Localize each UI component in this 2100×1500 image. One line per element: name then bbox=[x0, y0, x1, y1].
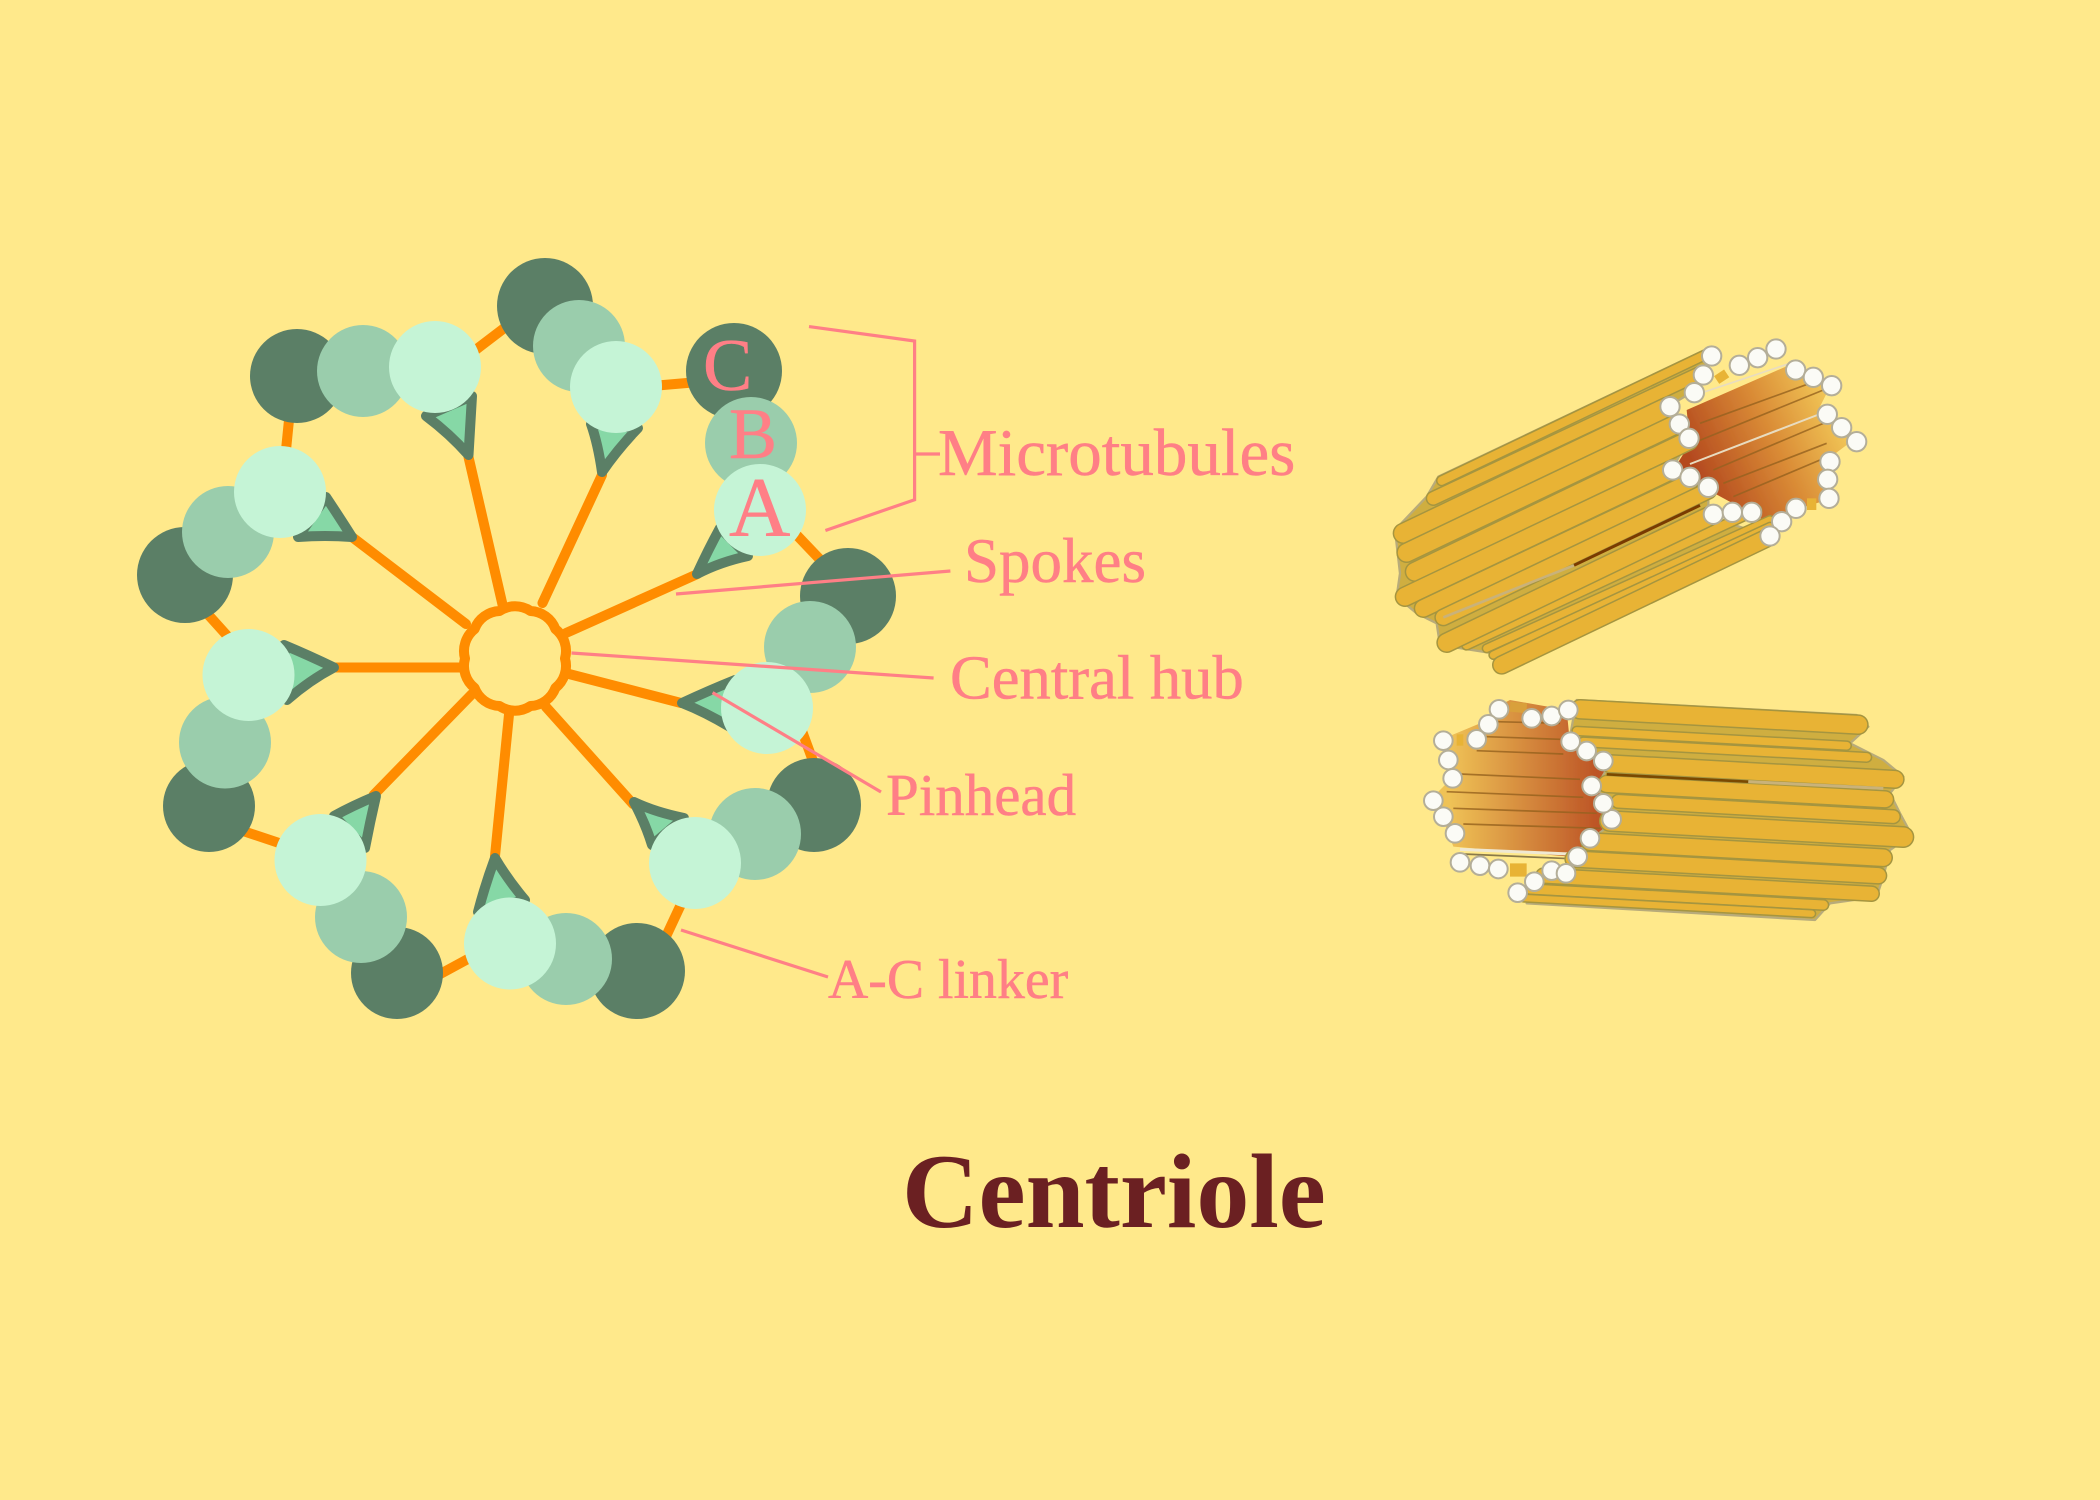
cross-section diagram bbox=[137, 258, 896, 1019]
barrel body bbox=[1395, 348, 1770, 672]
white tubule ends bbox=[1424, 700, 1621, 902]
barrel interior bbox=[1430, 700, 1617, 857]
label: C: C bbox=[703, 325, 752, 407]
upper centriole barrel bbox=[1395, 339, 1866, 672]
microtubule triplet 9 bbox=[137, 446, 326, 623]
rods bbox=[1580, 709, 1858, 725]
dark seam bbox=[1574, 505, 1700, 565]
microtubule triplet 7 bbox=[274, 814, 443, 1019]
leader: spokes bbox=[676, 571, 950, 594]
leader: A-C linker bbox=[681, 930, 828, 977]
spokes bbox=[334, 457, 698, 856]
microtubule triplet 5 bbox=[649, 758, 861, 909]
white tubule ends bbox=[1660, 339, 1866, 546]
microtubule triplet 2 bbox=[497, 258, 662, 433]
leader: microtubules bracket bbox=[809, 327, 940, 530]
label: Microtubules: Microtubules bbox=[938, 416, 1295, 490]
microtubule triplet 3 (A, B, C) bbox=[686, 323, 806, 556]
title: Centriole bbox=[902, 1133, 1326, 1250]
label: Central hub: Central hub bbox=[950, 642, 1244, 712]
lower centriole barrel bbox=[1424, 700, 1912, 920]
barrel body bbox=[1527, 700, 1912, 920]
label: Spokes: Spokes bbox=[964, 526, 1146, 596]
label: Pinhead: Pinhead bbox=[886, 762, 1076, 828]
microtubule triplet 8 bbox=[163, 629, 294, 852]
interior short rods bbox=[1717, 373, 1727, 380]
label: B: B bbox=[729, 394, 777, 474]
rods bbox=[1442, 353, 1708, 481]
label: A: A bbox=[729, 461, 790, 555]
leader: central hub bbox=[572, 653, 934, 678]
dark seam bbox=[1607, 774, 1748, 782]
interior short rods bbox=[1457, 723, 1463, 757]
pinheads bbox=[284, 396, 748, 912]
central hub bbox=[464, 606, 566, 711]
microtubule triplet 4 bbox=[721, 548, 896, 754]
barrel interior bbox=[1673, 363, 1853, 520]
A-C linkers bbox=[195, 316, 830, 985]
leader: pinhead bbox=[713, 693, 881, 792]
microtubule triplet 1 bbox=[250, 321, 481, 423]
label: A-C linker: A-C linker bbox=[828, 949, 1069, 1011]
microtubule triplet 6 bbox=[464, 898, 685, 1019]
